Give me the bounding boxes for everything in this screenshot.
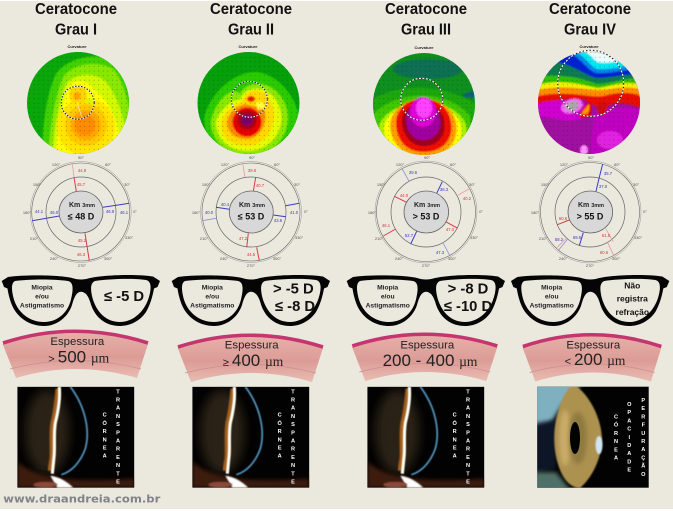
polar keratometry diagram Grau III: 47.3 [436,250,445,255]
polar keratometry diagram Grau II: 47.2 [239,236,248,241]
polar keratometry diagram Grau IV: Km 3mm [578,202,604,209]
polar keratometry diagram Grau II: 0° [304,209,308,214]
polar keratometry diagram Grau IV: 180° [531,210,540,215]
glasses Grau II [172,275,330,326]
cornea thickness Grau I: Espessura [50,336,105,348]
slit lamp photo Grau II: TRANSPARENTE [291,389,295,486]
polar keratometry diagram Grau III: > 53 D [413,212,440,222]
polar keratometry diagram Grau II [192,155,308,268]
polar keratometry diagram Grau I: 45.0 [50,210,59,215]
glasses Grau II: Miopia [202,284,223,291]
polar keratometry diagram Grau III: 330° [470,235,479,240]
polar keratometry diagram Grau I: 90° [78,155,84,160]
polar keratometry diagram Grau III: 150° [377,182,386,187]
heading: Ceratocone Grau I: Grau I [55,22,97,38]
polar keratometry diagram Grau III: 30° [469,182,475,187]
glasses Grau IV: Miopia [541,284,563,291]
heading: Ceratocone Grau II: Ceratocone [210,1,292,18]
polar keratometry diagram Grau II: 44.5 [247,252,256,257]
curvature map Grau I [27,46,129,154]
website url: www.draandreia.com.br [3,494,161,506]
polar keratometry diagram Grau III: 39.6 [409,170,418,175]
polar keratometry diagram Grau II: 180° [192,210,201,215]
glasses Grau III: > -8 D [448,281,489,297]
column 3: Grau III [347,1,505,488]
polar keratometry diagram Grau I: 150° [33,182,42,187]
polar keratometry diagram Grau I: 210° [30,236,39,241]
polar keratometry diagram Grau IV: 60.6 [600,250,609,255]
polar keratometry diagram Grau III: Km 3mm [414,202,440,209]
polar keratometry diagram Grau III: 0° [479,209,483,214]
eye photo Grau IV: CÓRNEA [614,414,619,462]
polar keratometry diagram Grau I: 330° [125,235,134,240]
polar keratometry diagram Grau I: 46.9 [106,209,115,214]
glasses Grau II: > -5 D [273,281,314,297]
curvature map Grau IV [537,44,642,155]
column 4: Grau IV [511,1,669,492]
slit lamp photo Grau III: TRANSPARENTE [466,389,470,486]
polar keratometry diagram Grau III: 40.2 [463,196,472,201]
heading: Ceratocone Grau II: Grau II [228,22,274,38]
slit lamp photo Grau II [192,387,309,488]
polar keratometry diagram Grau II: 40.4 [221,202,230,207]
glasses Grau I: e/ou [35,293,49,300]
slit lamp photo Grau III [367,387,484,488]
glasses Grau I: Astigmatismo [20,303,64,310]
curvature map Grau III: Curvature [415,45,434,50]
glasses Grau IV: Não [624,280,640,290]
polar keratometry diagram Grau IV: 59.5 [573,235,582,240]
heading: Ceratocone Grau III: Ceratocone [385,1,467,18]
glasses Grau II: Astigmatismo [190,303,234,310]
curvature map Grau III [373,46,475,155]
glasses Grau II: ≤ -8 D [275,299,315,315]
polar keratometry diagram Grau II: 41.0 [290,210,299,215]
eye photo Grau IV: OPACIDADE [627,402,632,474]
polar keratometry diagram Grau II: 330° [295,235,304,240]
heading: Ceratocone Grau IV [549,1,631,38]
slit lamp photo Grau I [17,387,134,488]
heading: Ceratocone Grau I [35,1,117,38]
heading: Ceratocone Grau I: Ceratocone [35,1,117,18]
polar keratometry diagram Grau IV: 37.0 [599,184,608,189]
polar keratometry diagram Grau III: 60° [450,162,456,167]
glasses Grau I: ≤ -5 D [104,289,144,305]
polar keratometry diagram Grau I: 45.2 [78,238,87,243]
heading: Ceratocone Grau III [385,1,467,38]
polar keratometry diagram Grau II: 30° [294,182,300,187]
polar keratometry diagram Grau IV: 330° [634,235,643,240]
polar keratometry diagram Grau III: 46.1 [382,223,391,228]
polar keratometry diagram Grau IV: 300° [612,256,621,261]
polar keratometry diagram Grau I [23,155,137,268]
polar keratometry diagram Grau IV: > 55 D [577,212,604,222]
column 2: Grau II [172,1,330,488]
polar keratometry diagram Grau II: 240° [220,256,229,261]
polar keratometry diagram Grau IV: 60.6 [559,216,568,221]
polar keratometry diagram Grau III: 120° [396,162,405,167]
glasses Grau IV: refração [616,307,649,317]
polar keratometry diagram Grau IV: 0° [643,209,647,214]
polar keratometry diagram Grau II: 40.0 [205,210,214,215]
polar keratometry diagram Grau I: 60° [105,162,111,167]
eye photo Grau IV: PERFURAÇÃO [641,398,646,478]
glasses Grau IV: Astigmatismo [530,303,574,310]
polar keratometry diagram Grau II: ≤ 53 D [238,212,265,222]
polar keratometry diagram Grau IV: 270° [586,263,595,268]
polar keratometry diagram Grau III: 36.3 [440,187,449,192]
polar keratometry diagram Grau II: 90° [249,155,255,160]
cornea thickness Grau IV: < 200 µm [565,350,626,369]
glasses Grau III [347,275,505,326]
polar keratometry diagram Grau I: 46.3 [77,252,86,257]
polar keratometry diagram Grau IV: 120° [560,162,569,167]
curvature map Grau II: Curvature [239,44,258,49]
polar keratometry diagram Grau III: 47.0 [446,227,455,232]
polar keratometry diagram Grau I: 240° [50,256,59,261]
slit lamp photo Grau III: CÓRNEA [453,413,458,460]
polar keratometry diagram Grau I: 44.1 [35,209,44,214]
polar keratometry diagram Grau II: 43.6 [274,218,283,223]
glasses Grau III: e/ou [381,293,395,300]
polar keratometry diagram Grau IV: 210° [539,236,548,241]
polar keratometry diagram Grau II: 120° [221,162,230,167]
polar keratometry diagram Grau I: 300° [104,256,113,261]
polar keratometry diagram Grau III [368,155,483,268]
polar keratometry diagram Grau IV: 60° [614,162,620,167]
cornea thickness Grau IV: Espessura [566,339,621,351]
heading: Ceratocone Grau IV: Ceratocone [549,1,631,18]
curvature map Grau II [197,44,301,162]
cornea thickness Grau III: Espessura [400,339,455,351]
polar keratometry diagram Grau I: 180° [23,210,32,215]
glasses Grau III: Astigmatismo [366,303,410,310]
heading: Ceratocone Grau II [210,1,292,38]
polar keratometry diagram Grau IV: 30° [633,182,639,187]
glasses Grau III: ≤ -10 D [444,299,493,315]
polar keratometry diagram Grau I: 46.1 [120,210,129,215]
glasses Grau IV: e/ou [545,293,559,300]
polar keratometry diagram Grau II: 40.7 [256,183,265,188]
polar keratometry diagram Grau III: 210° [375,236,384,241]
polar keratometry diagram Grau II: 210° [200,236,209,241]
polar keratometry diagram Grau IV: 240° [559,256,568,261]
cornea thickness Grau I: > 500 µm [48,348,110,367]
glasses Grau IV [511,275,669,326]
polar keratometry diagram Grau III: 240° [395,256,404,261]
glasses Grau I: Miopia [31,284,53,291]
polar keratometry diagram Grau III: 52.7 [405,233,414,238]
cornea thickness Grau I [3,331,148,378]
polar keratometry diagram Grau II: 300° [273,256,282,261]
polar keratometry diagram Grau III: 180° [368,210,377,215]
glasses Grau IV: registra [617,294,648,304]
cornea thickness Grau III [352,334,497,381]
cornea thickness Grau IV [523,335,661,382]
polar keratometry diagram Grau I: 30° [124,182,130,187]
polar keratometry diagram Grau IV: 35.7 [604,171,613,176]
glasses Grau III: Miopia [377,284,399,291]
polar keratometry diagram Grau I: 120° [52,162,61,167]
polar keratometry diagram Grau I: 0° [133,209,137,214]
polar keratometry diagram Grau II: 60° [274,162,280,167]
polar keratometry diagram Grau I: 45.7 [77,182,86,187]
polar keratometry diagram Grau IV: 90° [588,155,594,160]
heading: Ceratocone Grau III: Grau III [401,22,451,38]
cornea thickness Grau II: Espessura [225,339,279,351]
slit lamp photo Grau II: CÓRNEA [278,413,283,460]
glasses Grau II: e/ou [205,293,219,300]
polar keratometry diagram Grau II: Km 3mm [239,202,265,209]
polar keratometry diagram Grau I: ≤ 48 D [68,212,95,222]
polar keratometry diagram Grau III: 90° [424,155,430,160]
polar keratometry diagram Grau II: 39.6 [248,168,257,173]
polar keratometry diagram Grau III: 300° [448,256,457,261]
curvature map Grau I: Curvature [68,44,87,49]
polar keratometry diagram Grau I: 270° [78,263,87,268]
heading: Ceratocone Grau IV: Grau IV [564,22,616,38]
cornea thickness Grau III: 200 - 400 µm [383,351,478,370]
polar keratometry diagram Grau III: 44.0 [400,193,409,198]
polar keratometry diagram Grau IV: 58.2 [555,237,564,242]
curvature map Grau IV: Curvature [580,44,599,49]
eye photo Grau IV [537,386,649,488]
column 1: Grau I [2,1,160,488]
glasses Grau I [2,275,160,326]
polar keratometry diagram Grau II: 270° [247,263,256,268]
polar keratometry diagram Grau IV: 61.5 [602,233,611,238]
polar keratometry diagram Grau I: 44.8 [78,168,87,173]
slit lamp photo Grau I: TRANSPARENTE [116,389,120,486]
polar keratometry diagram Grau IV: 150° [541,182,550,187]
polar keratometry diagram Grau IV [531,155,647,268]
cornea thickness Grau II: ≥ 400 µm [223,351,284,370]
polar keratometry diagram Grau III: 270° [422,263,431,268]
polar keratometry diagram Grau II: 150° [202,182,211,187]
cornea thickness Grau II [178,335,323,382]
polar keratometry diagram Grau I: Km 3mm [69,202,95,209]
slit lamp photo Grau I: CÓRNEA [103,413,108,460]
